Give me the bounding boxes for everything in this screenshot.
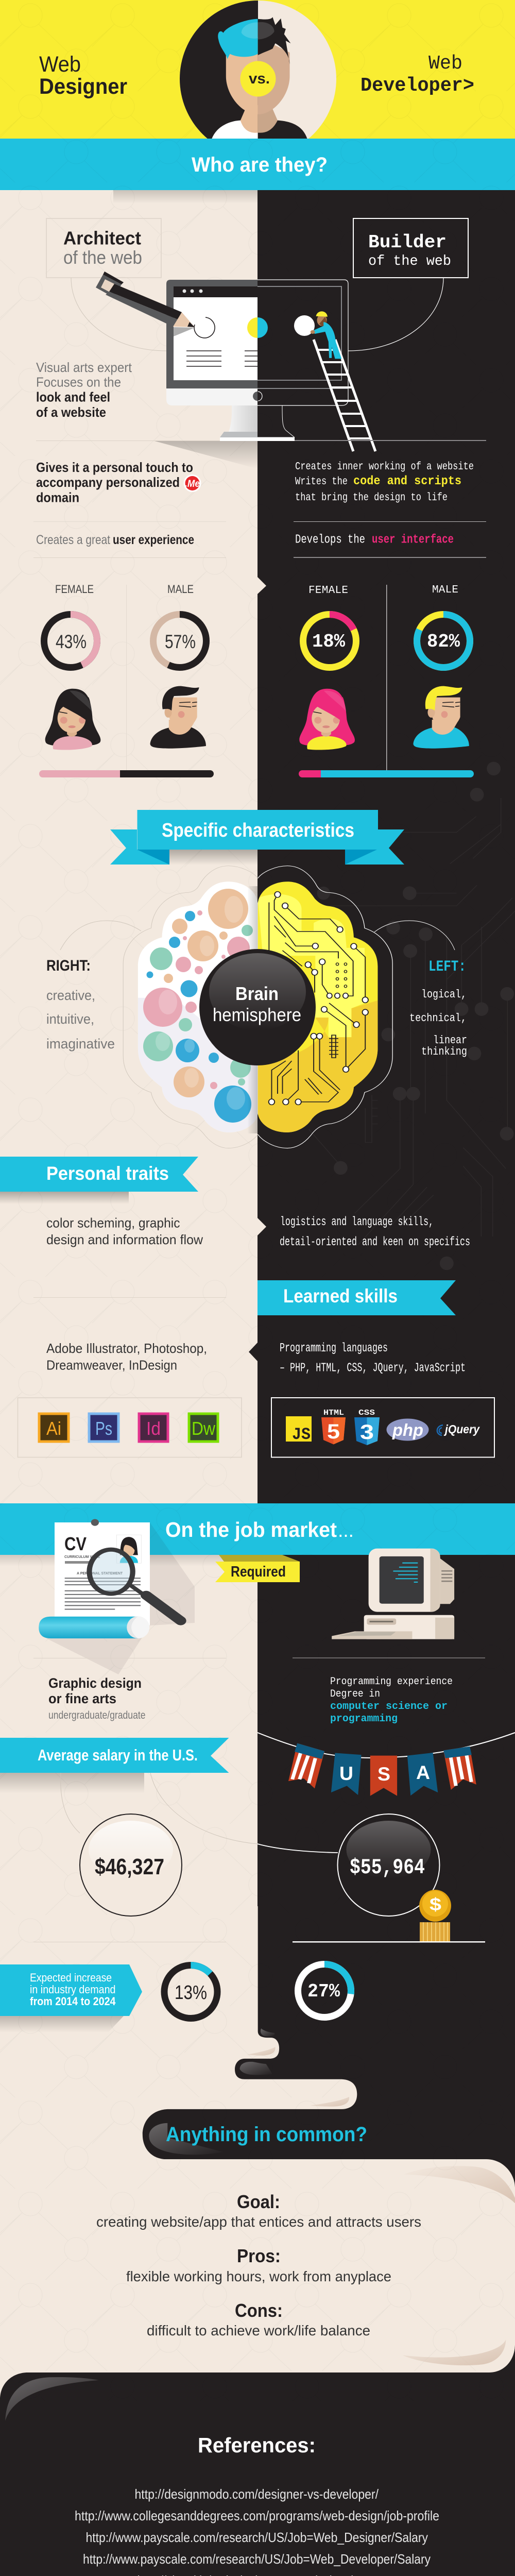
donut: designer female 43%: 43% [56, 631, 87, 652]
white circle [294, 315, 315, 336]
title: web developer: Developer> [360, 75, 474, 97]
gender labels: FEMALE [55, 583, 94, 596]
half circle shape yellow and cyan [247, 317, 268, 338]
text: inner workings: Writes the [295, 476, 348, 488]
list: reference links: http://designmodo.com/designer-vs-developer/ [135, 2486, 379, 2502]
text: personal traits designer: color scheming, graphic [46, 1215, 180, 1230]
connector curves salary [61, 1773, 338, 1853]
bar: designer gender split [39, 770, 214, 777]
text: user experience [36, 533, 194, 547]
shadows under job band [0, 1555, 258, 1566]
icon: html5: HTML [323, 1409, 344, 1417]
donut: designer demand 13% [164, 1965, 217, 2019]
donut: designer demand 13%: 13% [175, 1982, 207, 2004]
text: programming degree: Degree in [330, 1688, 380, 1700]
title: web developer: Web [428, 53, 462, 75]
illustration: cv and magnifier [39, 1519, 195, 1674]
illustration: cv and magnifier: A PERSONAL STATEMENT [77, 1572, 123, 1575]
dividers row two [33, 521, 486, 522]
salary circle: developer: $55,964 [350, 1855, 425, 1880]
heading: anything in common: Anything in common? [166, 2123, 367, 2146]
beige common panel [0, 2159, 515, 2400]
icon: illustrator [39, 1414, 68, 1442]
dividers row one [36, 440, 486, 441]
text: visual arts expert: of a website [36, 404, 106, 420]
vs badge [240, 61, 276, 97]
title: web designer: Designer [39, 74, 127, 99]
text: personal traits developer [280, 1215, 470, 1249]
icon: ladder [314, 340, 375, 451]
gender labels [55, 583, 458, 597]
dark blob boundary [143, 1906, 515, 2188]
icon: builder worker [311, 311, 341, 359]
ribbon: specific characteristics: Specific characteristics [162, 820, 354, 841]
letters on flags: A [416, 1762, 430, 1783]
panel: developer languages [271, 1398, 494, 1457]
donut: designer female 43% [44, 614, 97, 668]
gender labels: MALE [432, 584, 458, 596]
text: user interface [295, 533, 454, 547]
text: right hemisphere traits: imaginative [46, 1036, 115, 1052]
text: learned skills developer: Programming languages [280, 1342, 388, 1355]
heading: on the job market: ... [338, 1520, 354, 1541]
bar: developer gender split [299, 770, 474, 777]
avatar: designer male [150, 686, 206, 749]
icon: illustrator: Ai [46, 1418, 61, 1439]
gender labels: MALE [167, 583, 194, 596]
ribbon: average salary: Average salary in the U.S. [38, 1746, 198, 1764]
icon: javascript: JS [292, 1425, 311, 1444]
text: inner workings: code and scripts [353, 474, 461, 488]
label box: builder of the web: Builder [368, 232, 447, 253]
label box: architect of the web: of the web [63, 247, 142, 268]
text: cons [147, 2300, 370, 2338]
tag: required: Required [231, 1564, 286, 1580]
callout: expected increase: from 2014 to 2024 [30, 1995, 116, 2008]
flag: stripes right [443, 1747, 476, 1790]
donut: developer male 82% [417, 614, 470, 668]
illustration: cv and magnifier: CURRICULUM VITAE [64, 1555, 100, 1559]
icon: usa bunting flags [288, 1743, 476, 1796]
callout: expected increase: in industry demand [30, 1983, 115, 1996]
icon: photoshop [89, 1414, 118, 1442]
illustration: monitor left half [166, 280, 295, 441]
letters on flags: S [377, 1764, 390, 1785]
text: personal traits developer: logistics and language skills, [280, 1215, 434, 1229]
icon: me badge small [183, 474, 201, 492]
avatar: developer male [413, 686, 469, 749]
icon: indesign: Id [146, 1418, 161, 1439]
text: programming degree: computer science or [330, 1701, 448, 1713]
text: user interface: user interface [372, 533, 454, 547]
donut: developer male 82%: 82% [427, 631, 460, 652]
bunting string [258, 1733, 515, 1758]
flag: letter A [407, 1753, 438, 1795]
list: reference links: http://www.collegesanddegrees.com/programs/web-design/job-profile [75, 2508, 439, 2523]
icon: css3: 3 [360, 1421, 374, 1444]
text: visual arts expert [36, 360, 132, 420]
arcs around labels [60, 921, 455, 950]
heading: on the job market: On the job market [165, 1518, 337, 1541]
text: user experience: Creates a great [36, 533, 110, 547]
title: web developer [360, 53, 474, 97]
shadow under band [113, 190, 258, 204]
text: visual arts expert: Focuses on the [36, 374, 121, 389]
text: personal touch: Gives it a personal touch to [36, 460, 193, 475]
text: learned skills designer: Dreamweaver, InDesign [46, 1357, 177, 1372]
flag: letter U [331, 1753, 362, 1795]
text: goal: Goal: [237, 2191, 280, 2212]
text: left hemisphere traits [409, 958, 467, 1058]
text: pros: Pros: [237, 2245, 281, 2266]
text: left hemisphere traits: linear [433, 1034, 467, 1047]
text: right hemisphere traits: RIGHT: [46, 957, 91, 974]
label box: builder of the web [353, 218, 468, 278]
text: pros: flexible working hours, work from anyplace [126, 2268, 391, 2284]
header: designer vs developer portrait [180, 1, 336, 139]
connector curves [71, 278, 443, 351]
dark footer panel [0, 2345, 515, 2576]
arrow notch: gender section [258, 577, 266, 594]
text: left hemisphere traits: technical, [409, 1012, 467, 1025]
ribbon: personal traits: Personal traits [46, 1163, 169, 1184]
text: right hemisphere traits: creative, [46, 988, 95, 1003]
text: inner workings: Creates inner working of a website [295, 461, 474, 473]
brain: bubbles [143, 889, 253, 1123]
tag: required [215, 1555, 300, 1582]
text: programming degree [330, 1676, 453, 1725]
title: web designer: Web [39, 52, 81, 77]
ribbon: personal traits [0, 1157, 198, 1204]
title: web designer [39, 52, 127, 99]
text: programming degree: Programming experience [330, 1676, 453, 1688]
ribbon: learned skills [258, 1280, 456, 1315]
label box: builder of the web: of the web [368, 253, 451, 269]
list: reference links: http://www.payscale.com/research/US/Job=Web_Designer/Salary [85, 2530, 428, 2545]
list: reference links [75, 2486, 439, 2576]
text: cons: Cons: [235, 2300, 283, 2321]
letters on flags: U [339, 1763, 353, 1784]
blob highlights footer [5, 2340, 506, 2421]
icon: photoshop: Ps [95, 1418, 112, 1439]
circuit background pattern [309, 762, 515, 1270]
text: user interface: Develops the [295, 533, 365, 547]
icon: html5 [321, 1409, 346, 1445]
text: user experience: user experience [113, 533, 194, 547]
icon: css3 [354, 1409, 380, 1445]
text: pros [126, 2245, 391, 2284]
arrow notch: skills [249, 1343, 258, 1361]
ribbon: learned skills: Learned skills [283, 1285, 398, 1307]
icon: coin and stack [419, 1890, 451, 1942]
brain centre badge [199, 949, 316, 1065]
text: personal traits designer: design and information flow [46, 1232, 203, 1247]
icon: javascript [286, 1416, 312, 1444]
icon: me badge small: .Me [185, 479, 200, 489]
text: visual arts expert: look and feel [36, 389, 110, 405]
text: goal: creating website/app that entices and attracts users [96, 2214, 421, 2230]
gender labels: FEMALE [308, 585, 348, 597]
icon: jquery: jQuery [443, 1422, 480, 1436]
band: who are they [0, 139, 515, 190]
dividers row three [33, 557, 486, 558]
text: inner workings: that bring the design to life [295, 492, 448, 504]
text: personal touch: accompany personalized [36, 474, 180, 490]
text: inner workings [295, 461, 474, 504]
brain: right logical hemisphere [258, 866, 392, 1148]
vertical dividers [126, 585, 387, 777]
shadow below stand [154, 441, 258, 469]
text: personal touch: domain [36, 489, 79, 505]
ribbon: average salary [0, 1738, 229, 1793]
donut: developer female 18%: 18% [312, 631, 345, 652]
brain centre badge: Brain [235, 983, 279, 1004]
icon: pencil [96, 272, 195, 336]
heading: references: References: [198, 2433, 316, 2457]
flag: letter S [370, 1756, 397, 1796]
text: visual arts expert: Visual arts expert [36, 360, 132, 375]
icon: coin and stack: $ [430, 1895, 441, 1914]
text: programming degree: programming [330, 1713, 398, 1725]
text: graphic design degree: undergraduate/graduate [48, 1709, 145, 1721]
text: graphic design degree: Graphic design [48, 1675, 142, 1691]
avatar: developer female [299, 689, 355, 750]
icon: dreamweaver: Dw [192, 1418, 216, 1439]
donut: developer demand 27% [298, 1964, 351, 2018]
text: personal traits designer [46, 1215, 203, 1247]
text: left hemisphere traits: logical, [421, 988, 467, 1001]
donut: developer demand 27%: 27% [307, 1981, 340, 2002]
dividers requirements [33, 1657, 485, 1658]
salary circle: developer [338, 1814, 440, 1916]
flag: stripes left [288, 1743, 324, 1788]
list: reference links: http://www.payscale.com/research/US/Job=Web_Developer/Salary [83, 2551, 431, 2567]
illustration: retro computer [332, 1549, 454, 1639]
icon: css3: CSS [358, 1409, 375, 1417]
text: left hemisphere traits: thinking [421, 1045, 467, 1058]
text: learned skills designer: Adobe Illustrator, Photoshop, [46, 1341, 207, 1356]
text: graphic design degree [48, 1675, 145, 1721]
text: right hemisphere traits: intuitive, [46, 1011, 94, 1027]
salary circle: designer [80, 1814, 182, 1916]
blob highlights [149, 2028, 515, 2204]
vs badge: vs. [249, 71, 270, 87]
band: on the job market [0, 1503, 515, 1555]
text: left hemisphere traits: LEFT: [428, 958, 466, 976]
text: graphic design degree: or fine arts [48, 1691, 116, 1706]
label box: architect of the web: Architect [63, 228, 141, 248]
donut: designer male 57% [153, 614, 206, 668]
salary circle: designer: $46,327 [95, 1854, 164, 1879]
icon: indesign [139, 1414, 168, 1442]
arrow notch: traits [258, 1218, 266, 1235]
text: cons: difficult to achieve work/life balance [147, 2323, 370, 2338]
brain: left creative hemisphere [123, 866, 258, 1148]
icon: html5: 5 [327, 1420, 340, 1443]
icon: php: php [392, 1420, 423, 1439]
letters on flags [339, 1762, 430, 1785]
donut: designer male 57%: 57% [165, 631, 196, 652]
callout: expected increase: Expected increase [30, 1971, 112, 1984]
avatar: designer female [45, 689, 100, 750]
ribbon: specific characteristics [110, 810, 404, 865]
callout: expected increase [0, 1964, 142, 2032]
dividers salary [33, 1941, 485, 1942]
icon: dreamweaver [189, 1414, 218, 1442]
illustration: monitor right half wireframe [258, 280, 348, 437]
heading: who are they: Who are they? [192, 154, 328, 176]
brain centre badge: hemisphere [213, 1004, 301, 1025]
icon: php [386, 1419, 428, 1440]
illustration: cv and magnifier: CV [64, 1533, 87, 1554]
donut: developer female 18% [303, 614, 356, 668]
monitor button [253, 392, 258, 401]
panel: adobe tools [18, 1398, 242, 1457]
text: learned skills designer [46, 1341, 207, 1372]
text: right hemisphere traits [46, 957, 115, 1052]
brain shadow [247, 886, 258, 1133]
text: goal [96, 2191, 421, 2230]
text: learned skills developer [280, 1342, 466, 1376]
label box: architect of the web [46, 218, 161, 278]
text: personal touch [36, 460, 193, 505]
